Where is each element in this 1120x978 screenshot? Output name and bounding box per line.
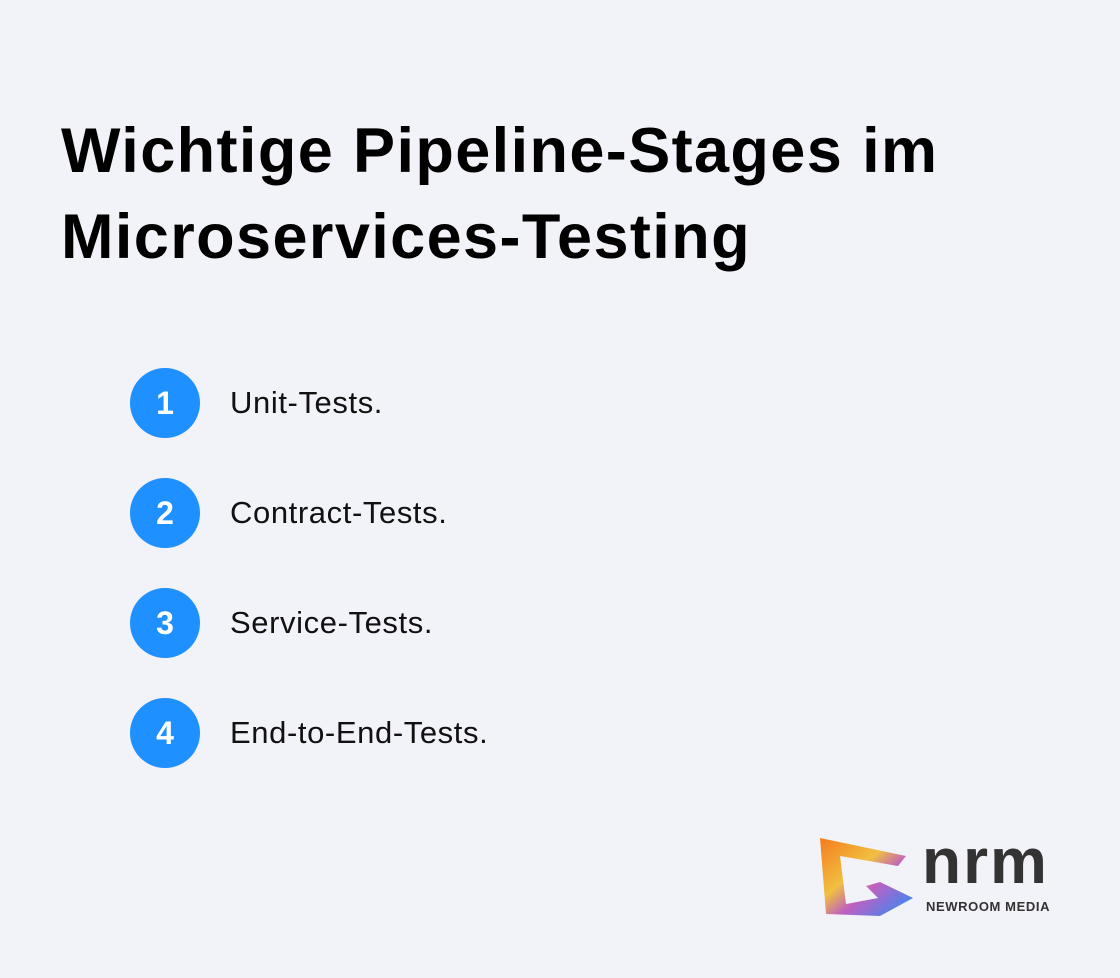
item 1: 1 [156,385,174,421]
item 1 [130,368,383,438]
title: Microservices-Testing [61,202,751,272]
item 4: End-to-End-Tests. [230,715,488,750]
logo [820,825,1050,916]
title: Wichtige Pipeline-Stages im [61,116,938,186]
item 2: 2 [156,495,174,531]
item 4 [130,698,488,768]
item 4: 4 [156,715,174,751]
logo: NEWROOM MEDIA [926,899,1050,914]
item 1: Unit-Tests. [230,385,383,420]
item 3 [130,588,433,658]
item 2: Contract-Tests. [230,495,447,530]
logo text: nrm [922,825,1049,897]
title [61,116,938,272]
item 3: Service-Tests. [230,605,433,640]
item 3: 3 [156,605,174,641]
icon: logo mark [820,838,913,916]
item 2 [130,478,447,548]
